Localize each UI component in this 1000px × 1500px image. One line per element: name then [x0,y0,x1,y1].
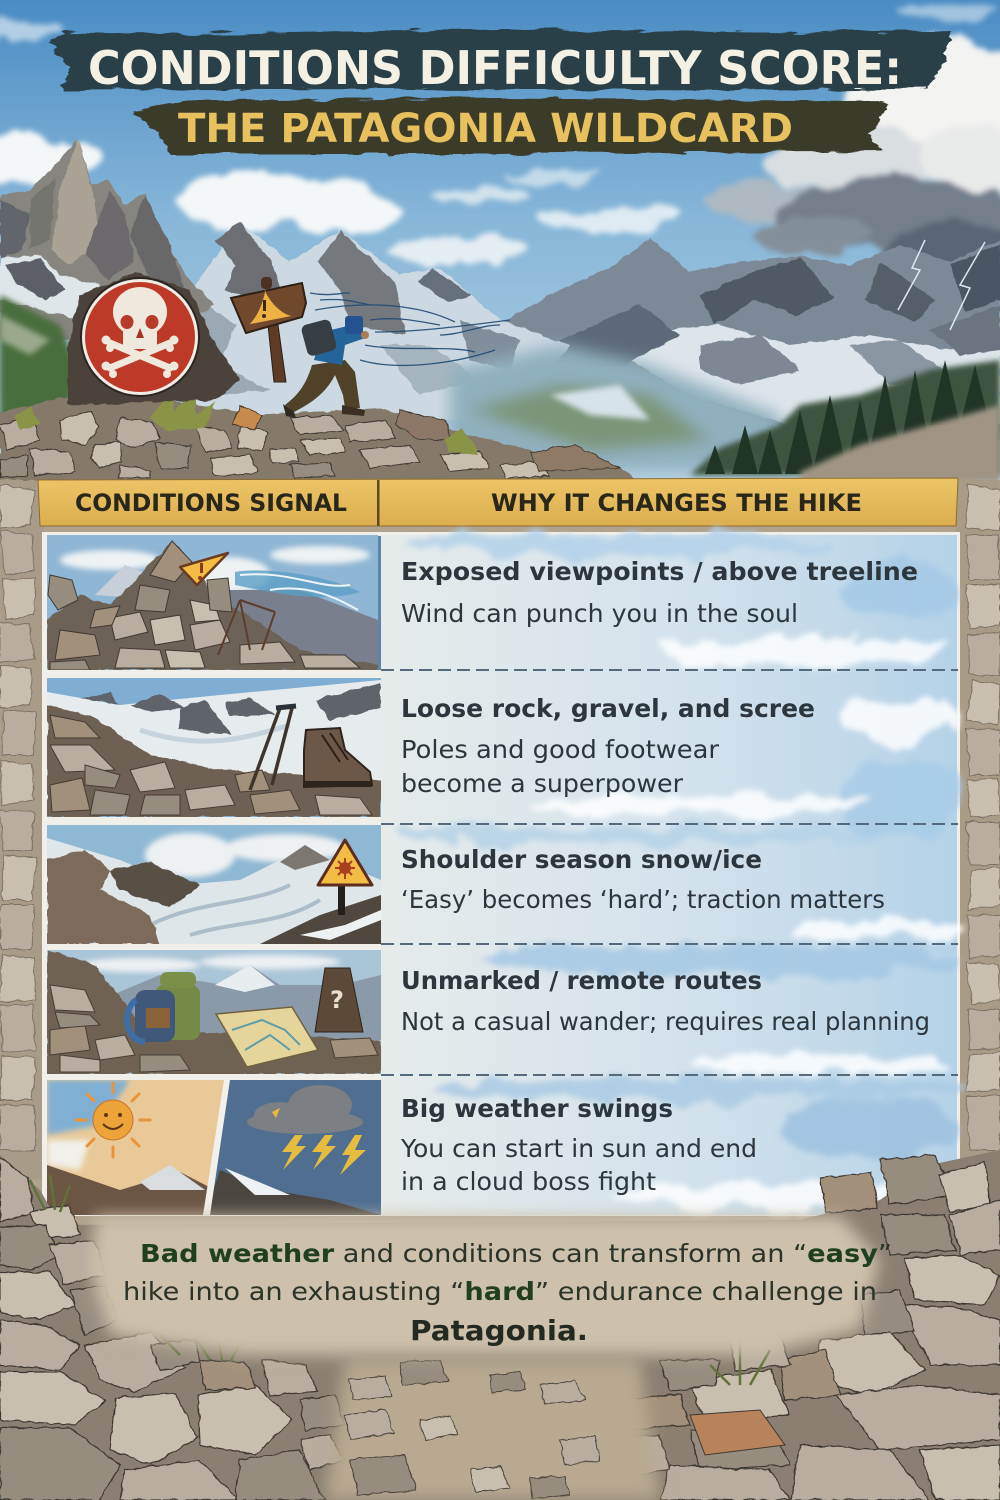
map [216,1007,318,1067]
skull and crossbones warning sign [68,272,240,405]
row 1 description: Wind can punch you in the soul [401,599,798,628]
storm lightning [898,240,985,330]
row 4 text [401,966,930,1036]
backpack [127,972,200,1042]
background: rocky trail ground [0,460,1000,1500]
column heading: conditions signal: CONDITIONS SIGNAL [75,489,347,517]
conclusion text: Patagonia. [410,1314,588,1347]
trail [325,1360,660,1500]
row 5 heading: Big weather swings [401,1094,673,1123]
conclusion text: hike into an exhausting “ hard” endurance challenge in [123,1277,877,1306]
row 2 description: Poles and good footwear [401,735,720,764]
wind streaks [310,293,510,365]
table header [38,478,958,526]
row 5 description [400,1134,757,1196]
mountains: left spires [0,138,215,340]
storm cloud with lightning [247,1085,366,1175]
row 2 text [401,694,815,798]
sun face [76,1083,150,1157]
title line two: THE PATAGONIA WILDCARD [178,106,793,152]
title banner [48,29,952,154]
row 3 heading: Shoulder season snow/ice [401,845,762,874]
valley and forest [0,295,1000,482]
row 3 text [401,845,885,914]
mountains: right range [470,238,1000,440]
row 2 description [401,735,720,798]
title line two [132,98,888,154]
sandy clearing [90,1216,880,1355]
foreground rocks and trail [0,1150,1000,1500]
table panel [42,532,970,1216]
row 1 heading: Exposed viewpoints / above treeline [401,557,918,586]
row 4 heading: Unmarked / remote routes [401,966,762,995]
row 2 description: become a superpower [401,769,684,798]
background: sky and clouds [0,0,1000,480]
conclusion text: Bad weather and conditions can transform an “ easy” [140,1239,892,1268]
side rock walls [0,480,1000,1180]
row 1 image: exposed viewpoint [47,535,378,670]
conclusion text [123,1239,892,1347]
hiker leaning into the wind [283,316,369,418]
row 4 image: unmarked remote routes: ? [330,986,344,1014]
foreground rocky ridge [0,388,650,490]
row 3 description: ‘Easy’ becomes ‘hard’; traction matters [401,885,885,914]
row 3 image: shoulder season snow [47,825,381,944]
row 5 image: big weather swings [47,1080,381,1215]
row 2 heading: Loose rock, gravel, and scree [401,694,815,723]
row 1 text [401,557,918,628]
warm stone [690,1410,785,1455]
row 5 description: You can start in sun and end [400,1134,757,1163]
trail marker [315,968,363,1032]
grass tufts [30,1175,770,1385]
wooden trail warning sign [231,277,306,382]
row 4 image: unmarked remote routes [47,950,381,1074]
row 2 image: loose rock and scree [47,678,381,817]
mountains: central snowy range [170,222,570,420]
row 5 description: in a cloud boss fight [401,1167,656,1196]
row dividers [381,670,958,1075]
background: distant mountain ranges [0,138,1000,440]
column heading: why it changes the hike: WHY IT CHANGES THE HIKE [491,489,862,517]
title line one: CONDITIONS DIFFICULTY SCORE: [88,41,902,95]
row 4 description: Not a casual wander; requires real planning [401,1007,930,1036]
row 5 text [400,1094,757,1196]
